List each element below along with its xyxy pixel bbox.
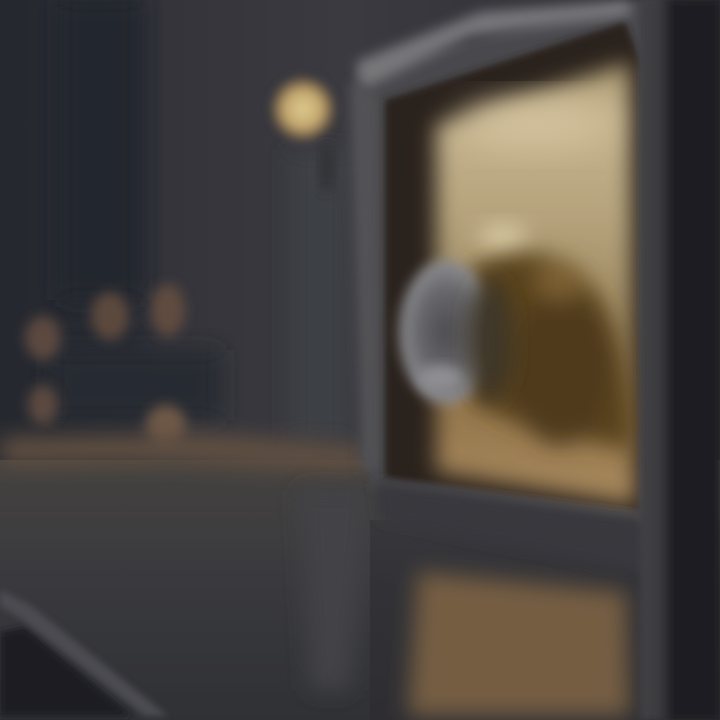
floor — [0, 434, 720, 720]
doorway reflection on floor — [408, 572, 630, 716]
right dark wall with frame post — [640, 0, 720, 720]
door frame outer — [355, 0, 662, 530]
ceiling glow — [460, 103, 610, 147]
door inner dark reveal — [385, 22, 640, 510]
lit room interior — [436, 62, 636, 505]
warm floor edge — [0, 434, 365, 472]
sill under doorway — [375, 482, 665, 575]
floor streak — [300, 490, 370, 690]
right-hand lower floor — [370, 520, 720, 720]
wall lamp — [265, 71, 341, 190]
round silver dial — [399, 260, 512, 404]
wall panel shading — [50, 0, 350, 440]
row of small warm lights — [25, 284, 186, 445]
diagonal highlight — [0, 590, 168, 716]
frame top highlight — [356, 0, 630, 90]
dark corner — [0, 627, 132, 716]
brown round mass — [470, 253, 632, 450]
room light spot — [479, 224, 527, 252]
frame left highlight — [350, 80, 378, 470]
